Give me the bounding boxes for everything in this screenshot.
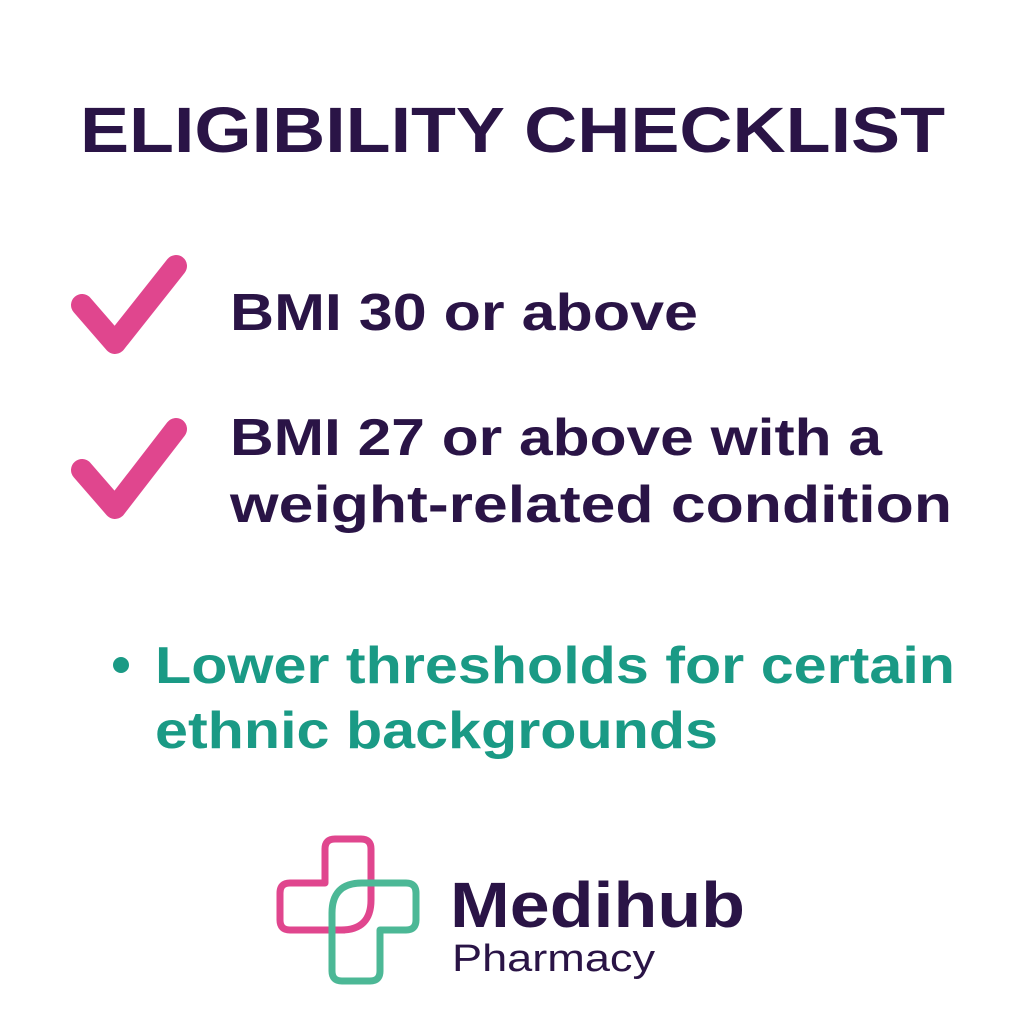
checklist item 1: [82, 266, 698, 343]
note: lower thresholds: ethnic backgrounds: [155, 702, 718, 760]
brand name: Medihub: [450, 869, 745, 941]
title: ELIGIBILITY CHECKLIST: [80, 94, 945, 166]
checklist item 2: [82, 409, 952, 534]
icon: check 1: [82, 266, 176, 343]
logo: [280, 839, 745, 981]
note: lower thresholds: [113, 637, 955, 760]
icon: check 2: [82, 429, 176, 508]
checklist item 2: weight-related condition: [229, 476, 952, 534]
checklist item 1: BMI 30 or above: [230, 284, 698, 342]
icon: cross logo: [280, 839, 416, 981]
logo: Pharmacy: [452, 938, 655, 980]
note: lower thresholds: Lower thresholds for certain: [155, 637, 955, 695]
checklist item 2: BMI 27 or above with a: [230, 409, 883, 467]
